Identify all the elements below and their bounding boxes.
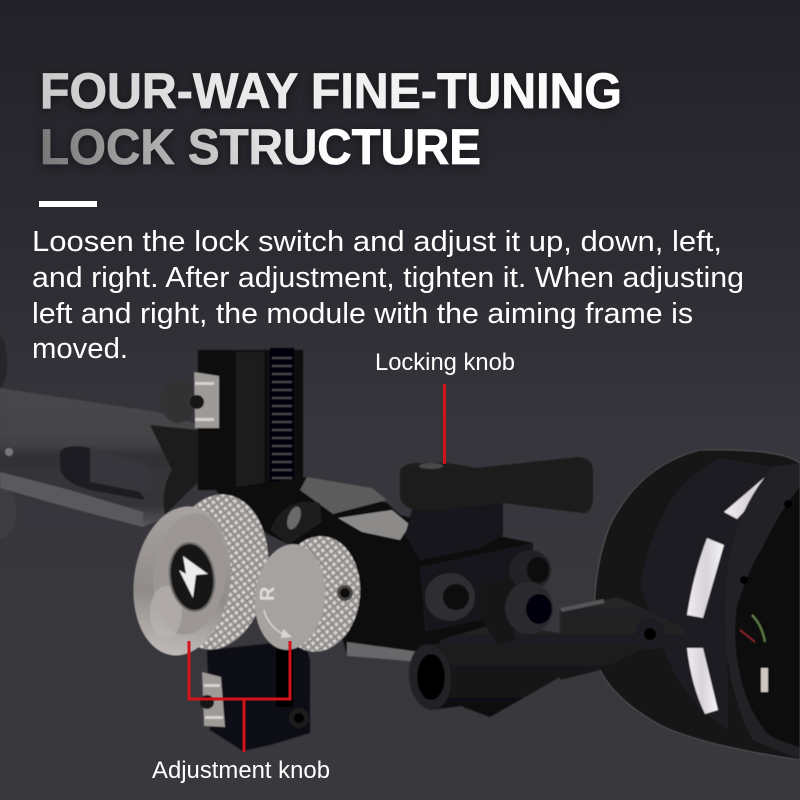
adjustment screws (425, 550, 553, 645)
barrel opening (417, 654, 445, 700)
big adjustment knob (124, 488, 278, 662)
description text: left and right, the module with the aiming frame is (32, 298, 693, 330)
upper silver tab (190, 372, 219, 428)
scope housing (594, 450, 800, 760)
sight pins (740, 615, 768, 692)
barrel (406, 597, 684, 717)
lever locking knob (400, 457, 593, 560)
description text: moved. (32, 333, 128, 365)
description text (32, 226, 744, 365)
description text: Loosen the lock switch and adjust it up, down, left, (32, 226, 722, 258)
product: bow sight (0, 336, 800, 760)
small adjustment knob: R (257, 586, 279, 601)
small adjustment knob (250, 532, 366, 656)
description text: and right. After adjustment, tighten it. When adjusting (32, 262, 744, 294)
knob behind tab (161, 381, 195, 423)
clamp block (215, 477, 533, 662)
logo badge (165, 540, 219, 614)
title shadow: LOCK STRUCTURE (40, 121, 481, 177)
lower silver tab (200, 672, 225, 727)
title shadow (40, 65, 622, 177)
callout: locking knob: Locking knob (375, 349, 515, 376)
title shadow: FOUR-WAY FINE-TUNING (40, 65, 622, 121)
front ring (725, 463, 800, 760)
callout: adjustment knob (152, 641, 330, 784)
callout: locking knob (375, 349, 515, 464)
title: FOUR-WAY FINE-TUNING (40, 63, 622, 119)
title: LOCK STRUCTURE (40, 119, 481, 175)
callout: adjustment knob: Adjustment knob (152, 757, 330, 784)
title underline bar (39, 201, 97, 207)
mounting arm (0, 336, 205, 538)
title (40, 63, 622, 177)
vertical rail with scale (198, 348, 310, 751)
fiber bands (687, 476, 778, 714)
